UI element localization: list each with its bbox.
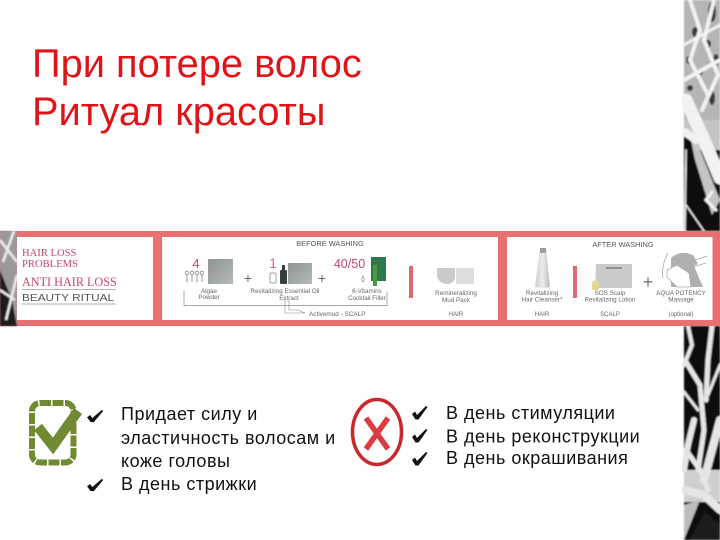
algae powder xyxy=(185,256,233,301)
divider xyxy=(573,266,577,298)
aqua potency massage: AQUA POTENCY xyxy=(656,290,707,297)
algae powder: Powder xyxy=(198,294,220,301)
vitamins cocktail filler: 40/50 xyxy=(334,257,365,271)
list: not recommended: В день реконструкции xyxy=(446,426,640,446)
icon: green check box xyxy=(32,403,78,462)
panel: after washing: AFTER WASHING xyxy=(592,240,654,249)
essential oil extract: Extract xyxy=(279,295,299,302)
remineralizing mud pack: Mud Pack xyxy=(442,297,471,304)
coral photo strip: lower right xyxy=(684,326,720,540)
icon: tick bullet 2 xyxy=(87,479,103,491)
sos scalp lotion xyxy=(584,264,636,318)
divider xyxy=(409,266,413,298)
list: recommended: эластичность волосам и xyxy=(121,428,336,448)
remineralizing mud pack xyxy=(435,268,477,318)
activemud bracket: Activemud - SCALP xyxy=(309,311,365,318)
icon: red cross xyxy=(352,400,402,464)
revitalizing hair cleanser: Revitalizing xyxy=(526,290,559,297)
list: recommended: коже головы xyxy=(121,451,230,471)
essential oil extract: 1 xyxy=(269,255,277,271)
algae powder: Algae xyxy=(201,288,218,295)
icon: tick bullet 3 xyxy=(412,406,428,420)
title xyxy=(32,42,362,134)
icon: tick bullet 5 xyxy=(412,452,428,466)
plus sign: + xyxy=(318,270,326,286)
panel: hair loss heading xyxy=(17,237,153,320)
sos scalp lotion: SCALP xyxy=(600,312,620,318)
remineralizing mud pack: HAIR xyxy=(449,312,464,318)
sos scalp lotion: SOS Scalp xyxy=(595,290,626,297)
coral photo thumbnail xyxy=(0,231,17,326)
panel: after washing xyxy=(507,237,712,320)
list: not recommended: В день стимуляции xyxy=(446,403,616,423)
revitalizing hair cleanser xyxy=(522,248,563,318)
activemud bracket xyxy=(184,290,387,318)
aqua potency massage xyxy=(656,253,707,318)
aqua potency massage: Massage xyxy=(668,296,694,304)
essential oil extract: Revitalizing Essential Oil xyxy=(251,288,319,295)
title: При потере волос xyxy=(32,42,362,86)
plus sign: + xyxy=(244,270,252,286)
list: recommended: Придает силу и xyxy=(121,404,258,424)
aqua potency massage: (optional) xyxy=(668,312,694,318)
vitamins cocktail filler: 6-Vitamins xyxy=(352,288,382,295)
panel: before washing xyxy=(162,237,498,320)
revitalizing hair cleanser: Hair Cleanser* xyxy=(522,296,563,304)
list: not recommended xyxy=(412,403,640,468)
panel: hair loss heading: BEAUTY RITUAL xyxy=(22,293,115,304)
vitamins cocktail filler xyxy=(334,257,386,302)
panel: before washing: BEFORE WASHING xyxy=(296,239,364,248)
coral photo strip: upper right xyxy=(684,0,720,231)
revitalizing hair cleanser: HAIR xyxy=(535,312,550,318)
icon: tick bullet 1 xyxy=(87,410,103,422)
panel: hair loss heading: ANTI HAIR LOSS xyxy=(22,275,117,289)
vitamins cocktail filler: Cocktail Filler xyxy=(348,295,386,302)
list: not recommended: В день окрашивания xyxy=(446,448,628,468)
icon: tick bullet 4 xyxy=(412,429,428,442)
title: Ритуал красоты xyxy=(32,90,325,134)
remineralizing mud pack: Remineralizing xyxy=(435,290,477,297)
algae powder: 4 xyxy=(192,256,200,271)
ritual banner xyxy=(0,231,720,326)
essential oil extract xyxy=(251,255,319,302)
panel: hair loss heading: PROBLEMS xyxy=(22,259,78,270)
panel: hair loss heading: HAIR LOSS xyxy=(22,248,77,259)
sos scalp lotion: Revitalizing Lotion xyxy=(584,296,636,304)
list: recommended: В день стрижки xyxy=(121,474,257,494)
plus sign: + xyxy=(643,272,653,292)
list: recommended xyxy=(87,404,336,494)
